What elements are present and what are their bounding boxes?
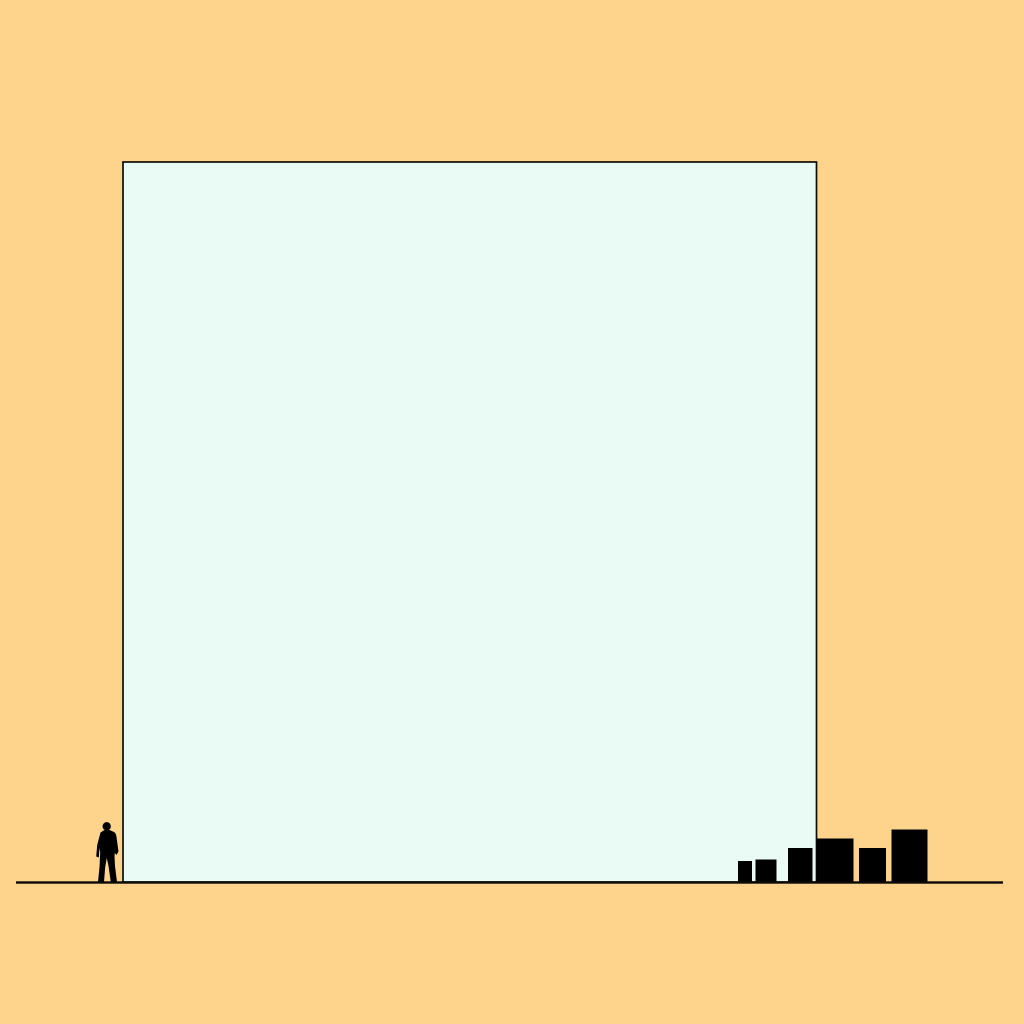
panel: large pale square	[123, 162, 816, 882]
ground line	[16, 881, 1003, 884]
icon: human silhouette	[96, 822, 118, 882]
icon: group of small buildings	[738, 830, 928, 882]
